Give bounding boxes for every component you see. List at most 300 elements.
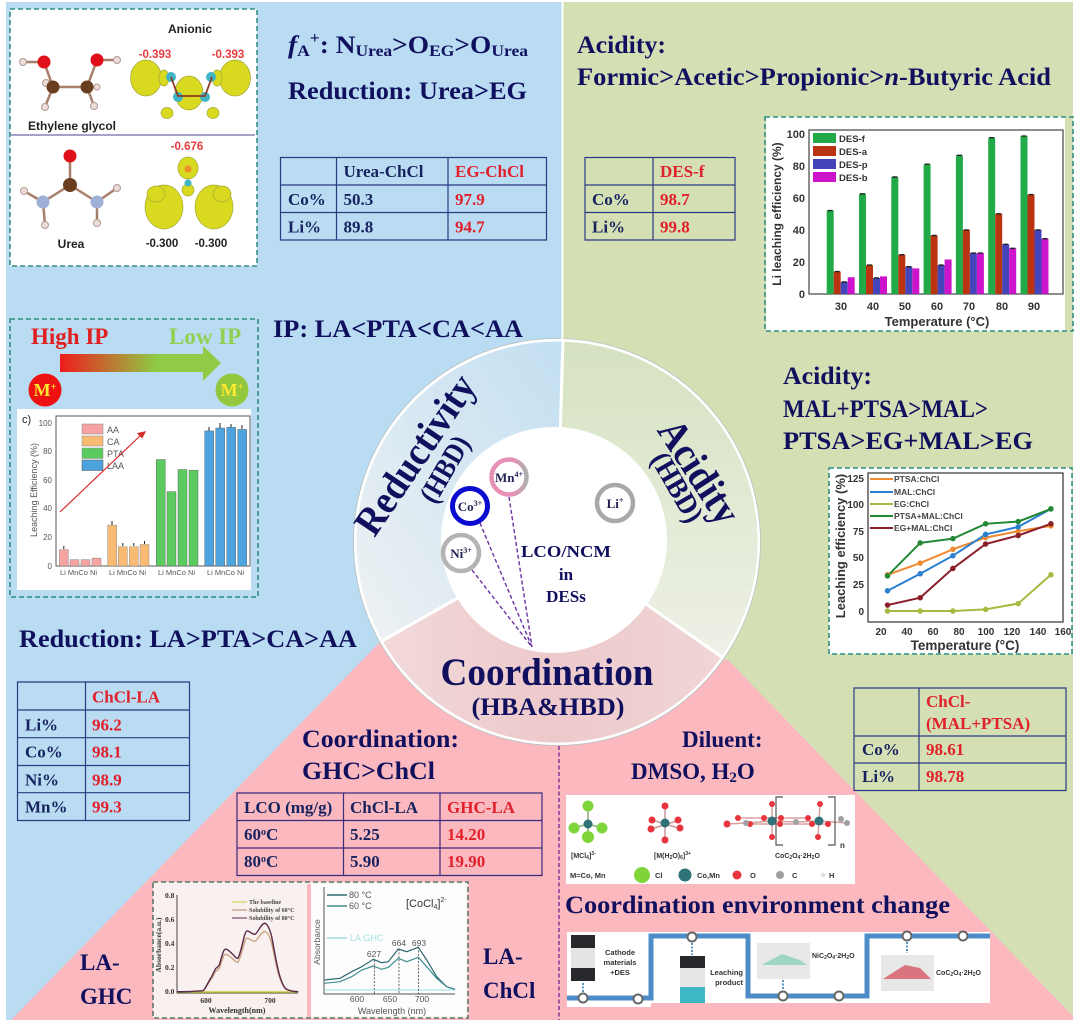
table: ChCl-(MAL+PTSA): Co%: [862, 740, 900, 759]
structure: CoC2O4 chain: n: [840, 841, 845, 850]
atom legend: O: [750, 871, 756, 880]
heading: diluent: DMSO, H: [631, 759, 729, 784]
atom legend: H: [829, 871, 834, 880]
axis labels: 650: [383, 994, 397, 1004]
atom legend: [570, 867, 834, 883]
table: urea vs EG: [280, 158, 546, 240]
heading: fA+ order: : N: [320, 32, 356, 59]
series: LAA: [205, 427, 247, 566]
table: ChCl-LA: 98.9: [92, 771, 122, 790]
ion: Li+: +: [619, 496, 624, 505]
structure: CoC2O4 chain: O: [814, 853, 820, 860]
table: LCO solubility: C: [266, 852, 278, 871]
centre text: in: [559, 565, 574, 584]
axis labels: 75: [853, 527, 864, 538]
sample: NiC2O4: 2: [824, 955, 827, 961]
axis labels: 0: [48, 562, 53, 571]
heading: fA+ order: Urea: [491, 43, 528, 60]
axis labels: 80: [996, 301, 1008, 313]
label: LA-GHC: GHC: [80, 984, 132, 1009]
table: urea vs EG: Co%: [288, 190, 326, 209]
table: LCO solubility: C: [266, 825, 278, 844]
line: EG+MAL: [888, 524, 1051, 605]
central ring diagram: [345, 338, 760, 746]
formula label: 2-: [440, 897, 447, 904]
axis labels: Wavelength(nm): [209, 1006, 266, 1015]
pipeline: [567, 936, 990, 998]
axis labels: Li MnCo Ni: [207, 568, 244, 577]
axis labels: Li leaching efficiency (%): [770, 142, 784, 286]
axis labels: 100: [39, 419, 53, 428]
table: ChCl-(MAL+PTSA): [854, 688, 1066, 790]
panel: ionization potential: [10, 319, 258, 597]
table: ChCl-LA: 98.1: [92, 743, 122, 762]
axis labels: 0: [799, 289, 805, 301]
bar chart: leaching efficiency: [17, 409, 251, 590]
atom legend: C: [792, 871, 798, 880]
sample: CoC2O4: 4: [959, 972, 962, 978]
series: DES-b: [848, 239, 1048, 294]
ion: Mn4+: [492, 460, 526, 494]
legend: PTSA:ChCl: [894, 474, 939, 484]
legend: [870, 474, 963, 533]
label: cathode materials: materials: [604, 958, 636, 967]
atom legend: M=Co, Mn: [570, 871, 606, 880]
heading: fA+ order: EG: [429, 43, 455, 60]
table: LCO solubility: o: [261, 827, 266, 838]
heading: fA+ order: >O: [392, 32, 429, 59]
ion: Ni3+: [443, 535, 479, 571]
table: ChCl-(MAL+PTSA): 98.78: [926, 767, 964, 786]
ion: Mn4+: 4+: [514, 470, 523, 479]
series: DES-p: [841, 230, 1042, 294]
label: LA-ChCl: LA-: [483, 944, 523, 969]
legend: LAA: [107, 461, 124, 471]
axis labels: 100: [978, 627, 995, 638]
label: Low IP: Low IP: [169, 324, 241, 349]
metal ion: low IP: [216, 374, 248, 406]
table: ChCl-(MAL+PTSA): 98.61: [926, 740, 964, 759]
molecule: ethylene glycol: [20, 54, 120, 133]
axis labels: [312, 919, 429, 1016]
heading: fA+ order: A: [297, 43, 310, 60]
axis labels: 20: [793, 257, 805, 269]
table: DES-f: DES-f: [660, 162, 705, 181]
connectors: [583, 942, 907, 995]
formula label: [CoCl: [406, 898, 434, 910]
sample: CoC2O4: 2: [973, 972, 976, 978]
centre text: LCO/NCM: [521, 542, 611, 561]
line: MAL: [888, 509, 1051, 591]
formula label: ]: [437, 898, 440, 910]
table: LCO solubility: 5.90: [350, 852, 380, 871]
legend: [327, 890, 384, 943]
axis labels: 664: [392, 938, 406, 948]
structure: CoC2O4 chain: CoC: [775, 853, 789, 860]
legend: PTA: [107, 449, 124, 459]
axis labels: [29, 419, 244, 577]
legend: EG:ChCl: [894, 499, 929, 509]
vial: cathode materials: [571, 935, 595, 981]
axis labels: 40: [43, 504, 53, 513]
legend: DES-p: [839, 160, 868, 171]
structure: MCl4: [MCl: [571, 853, 586, 860]
heading: acidity acids: [577, 32, 1051, 91]
table: LCO solubility: 80: [244, 852, 261, 871]
table: ChCl-LA: Co%: [25, 743, 63, 762]
curve: 60C: [324, 957, 455, 989]
heading: acidity MAL PTSA: [783, 363, 1033, 455]
sample: NiC2O4: [757, 943, 855, 979]
charge density: ethylene glycol: Anionic: [168, 22, 212, 36]
table: ChCl-(MAL+PTSA): ChCl-: [926, 692, 971, 711]
legend: DES-a: [839, 147, 868, 158]
axis labels: 20: [43, 533, 53, 542]
axis labels: 600: [200, 996, 212, 1005]
table: LCO solubility: o: [261, 854, 266, 865]
centre text: [521, 542, 611, 606]
ion: Co3+: Co: [458, 499, 474, 514]
series: DES-f: [827, 136, 1028, 294]
chart: LA-ChCl absorbance: [311, 884, 466, 1016]
structure: MCl4: [568, 800, 608, 861]
label: cathode materials: [604, 948, 636, 977]
metal ion: low IP: +: [238, 382, 244, 393]
table: ChCl-LA: 99.3: [92, 798, 122, 817]
bar chart: leaching efficiency: c): [22, 414, 31, 426]
heading: coordination GHC: Coordination:: [302, 726, 459, 753]
label: leaching product: [710, 968, 743, 987]
table: DES-f: Co%: [592, 190, 630, 209]
label: Acidity: Acidity: [649, 410, 751, 533]
table: DES-f: 99.8: [660, 218, 690, 236]
sample: CoC2O4: O: [953, 970, 959, 977]
label: cathode materials: +DES: [610, 968, 630, 977]
label: LA-ChCl: ChCl: [483, 978, 535, 1003]
structure: MCl4: ]: [589, 853, 591, 860]
heading: fA+ order: +: [310, 30, 320, 47]
heading: IP order: IP: LA<PTA<CA<AA: [273, 316, 523, 343]
axis labels: 60: [927, 627, 939, 638]
axis labels: Wavelength (nm): [358, 1006, 426, 1016]
structure: M(H2O)6: 2: [670, 855, 673, 861]
centre circle: [441, 427, 667, 653]
table: ChCl-LA: Li%: [25, 716, 58, 734]
series: PTA: [156, 460, 198, 566]
table: ChCl-LA: ChCl-LA: [92, 688, 161, 707]
table: DES-f: [585, 158, 735, 240]
axis labels: Li MnCo Ni: [158, 568, 195, 577]
curve: 60C: [177, 932, 298, 992]
table: ChCl-(MAL+PTSA): Li%: [862, 767, 895, 786]
axis labels: Absorbance(a.u.): [154, 917, 163, 973]
label: LA-GHC: LA-: [80, 950, 120, 975]
heading: reduction urea: Reduction: Urea>EG: [288, 78, 527, 105]
markers: [888, 509, 1051, 611]
heading: coordination GHC: GHC>ChCl: [302, 758, 435, 785]
metal ion: high IP: M: [34, 380, 51, 400]
joints: [578, 932, 968, 1004]
legend: Solubility of 80°C: [249, 915, 294, 922]
ion: Ni3+: Ni: [450, 546, 463, 561]
structure: MCl4: 4: [586, 855, 589, 861]
panel: molecules: [10, 9, 257, 266]
sample: CoC2O4: 2: [950, 972, 953, 978]
divider between blue and green: [562, 2, 564, 341]
background: pink coordination region: [11, 642, 1073, 1020]
line: PTSA+MAL: [888, 509, 1051, 576]
table: urea vs EG: 94.7: [455, 218, 485, 236]
legend: PTSA+MAL:ChCl: [894, 511, 963, 521]
panel: Li leaching bar chart: [765, 117, 1073, 331]
charge density: ethylene glycol: -0.393: [212, 49, 244, 61]
axis labels: 80: [953, 627, 965, 638]
table: LCO solubility: 19.90: [447, 852, 485, 871]
heading: acidity acids: Acidity:: [577, 32, 666, 59]
axis labels: 160: [1055, 627, 1072, 638]
axis labels: Leaching efficiency (%): [833, 474, 848, 618]
charge density: ethylene glycol: [130, 22, 250, 118]
legend: 60 °C: [349, 901, 372, 911]
metal ion: high IP: +: [51, 382, 57, 393]
axis labels: [154, 891, 276, 1015]
panel: coordination structures: [566, 795, 855, 884]
ring outline: [354, 338, 760, 746]
axis labels: 0.4: [165, 939, 175, 948]
legend: [82, 424, 124, 471]
background: blue reductivity region: [6, 2, 562, 1020]
heading: acidity MAL PTSA: MAL+PTSA>MAL>: [783, 396, 988, 423]
label: HBD reductivity: (HBD): [413, 430, 477, 509]
molecule: ethylene glycol: Ethylene glycol: [28, 119, 116, 133]
structure: M(H2O)6: [648, 802, 691, 861]
table: ChCl-LA: [18, 682, 190, 820]
molecule: urea: [20, 150, 120, 251]
formula label: 4: [434, 904, 438, 911]
table: urea vs EG: 97.9: [455, 190, 485, 209]
structure: M(H2O)6: 3+: [685, 851, 691, 857]
axis labels: 120: [1004, 627, 1021, 638]
table: DES-f: Li%: [592, 218, 625, 236]
sample: CoC2O4: CoC: [936, 970, 950, 977]
metal ion: high IP: [28, 374, 62, 406]
chart: LA-GHC absorbance: [154, 891, 298, 1015]
series: DES-a: [834, 195, 1034, 294]
table: urea vs EG: 50.3: [344, 190, 373, 209]
ion: Li+: [597, 485, 633, 521]
label: LA-GHC: [80, 950, 132, 1009]
axis labels: Absorbance: [312, 919, 322, 965]
axis labels: 700: [415, 994, 429, 1004]
legend: DES-b: [839, 173, 868, 184]
curve: 80C: [177, 923, 298, 992]
table: ChCl-LA: Ni%: [25, 771, 59, 790]
charge density: ethylene glycol: -0.393: [139, 49, 171, 61]
axis labels: 0.6: [165, 915, 175, 924]
table: LCO solubility: 14.20: [447, 825, 485, 844]
axis labels: 627: [367, 949, 381, 959]
label: cathode materials: Cathode: [605, 948, 635, 957]
axis labels: [770, 129, 1040, 329]
table: DES-f: 98.7: [660, 190, 690, 209]
axis labels: [833, 474, 1072, 653]
legend: CA: [107, 437, 120, 447]
atom legend: Cl: [655, 871, 662, 880]
axis labels: Temperature (°C): [911, 638, 1019, 653]
legend: AA: [107, 425, 119, 435]
label: HBD acidity: (HBD): [644, 447, 710, 528]
gradient arrow: [60, 346, 221, 381]
sample: NiC2O4: ·2H: [835, 953, 846, 960]
structure: M(H2O)6: 6: [680, 855, 683, 861]
sample: NiC2O4: NiC: [812, 953, 824, 960]
heading: acidity MAL PTSA: PTSA>EG+MAL>EG: [783, 428, 1033, 455]
heading: fA+ order: f: [288, 32, 300, 59]
structure: CoC2O4 chain: [724, 797, 850, 861]
heading: fA+ order: >O: [454, 32, 491, 59]
sample: NiC2O4: 2: [846, 955, 849, 961]
table: urea vs EG: Urea-ChCl: [344, 162, 424, 181]
heading: acidity acids: Formic>Acetic>Propionic> n-Butyric Acid: [577, 64, 1051, 91]
structure: M(H2O)6: ]: [683, 853, 685, 860]
axis labels: 0.0: [165, 987, 175, 996]
heading: diluent: Diluent:: [682, 727, 762, 752]
axis labels: 70: [963, 301, 975, 313]
axis labels: 600: [350, 994, 364, 1004]
background: green acidity region: [563, 2, 1073, 1020]
structure: M(H2O)6: O): [672, 853, 680, 860]
table: LCO solubility: GHC-LA: [447, 798, 516, 817]
heading: diluent: O: [737, 759, 755, 784]
divider in coordination region: [558, 746, 560, 1020]
ion: Co3+: [452, 488, 488, 524]
axis labels: 100: [847, 500, 864, 511]
sample: NiC2O4: O: [827, 953, 833, 960]
heading: fA+ order: Urea: [356, 43, 392, 60]
axis labels: 40: [867, 301, 879, 313]
axis labels: 693: [412, 938, 426, 948]
axis labels: 60: [43, 476, 53, 485]
heading: coordination GHC: [302, 726, 459, 785]
ion: Li+: Li: [607, 496, 619, 511]
label: HBA and HBD: (HBA&HBD): [472, 694, 624, 721]
axis labels: 0.2: [165, 963, 175, 972]
axis labels: Li MnCo Ni: [60, 568, 97, 577]
legend: The baseline: [249, 900, 282, 906]
axis labels: 0: [858, 607, 864, 618]
legend: [813, 133, 868, 184]
axis labels: Temperature (°C): [885, 314, 989, 329]
vial: leaching product: [680, 956, 705, 1003]
structure: CoC2O4 chain: ·2H: [800, 853, 812, 860]
ion: Ni3+: 3+: [463, 546, 472, 555]
label: Reductivity: Reductivity: [345, 366, 485, 543]
panel: leaching line chart: [829, 468, 1072, 654]
trend arrow: [60, 432, 145, 512]
curve: 80C: [324, 947, 455, 989]
table: LCO solubility: ChCl-LA: [350, 798, 419, 817]
label: LA-ChCl: [483, 944, 535, 1003]
axis labels: 50: [899, 301, 911, 313]
segment: acidity: [557, 340, 759, 658]
table: urea vs EG: Li%: [288, 218, 321, 236]
molecule: urea: Urea: [58, 237, 85, 251]
table: urea vs EG: EG-ChCl: [455, 162, 524, 181]
segment: reductivity: [355, 340, 563, 641]
sample: CoC2O4: [881, 955, 981, 991]
series: AA: [59, 550, 101, 566]
legend: LA:GHC: [350, 933, 384, 943]
axis labels: 25: [853, 580, 864, 591]
heading: acidity MAL PTSA: Acidity:: [783, 363, 872, 390]
sample: NiC2O4: O: [849, 953, 855, 960]
centre text: DESs: [546, 587, 586, 606]
structure: M(H2O)6: [M(H: [654, 853, 670, 860]
structure: CoC2O4 chain: 2: [789, 855, 792, 861]
table: urea vs EG: 89.8: [344, 218, 373, 236]
heading: diluent: 2: [729, 770, 737, 786]
line: PTSA: [888, 526, 1051, 575]
axis labels: Leaching Efficiency (%): [29, 443, 39, 537]
axis labels: Li MnCo Ni: [109, 568, 146, 577]
legend: 80 °C: [349, 890, 372, 900]
sample: CoC2O4: ·2H: [961, 970, 973, 977]
table: LCO solubility: [237, 793, 542, 876]
label: High IP: High IP: [31, 324, 108, 349]
axis labels: 20: [875, 627, 887, 638]
sample: CoC2O4: O: [975, 970, 981, 977]
table: LCO solubility: LCO (mg/g): [244, 798, 332, 817]
axis labels: 80: [43, 447, 53, 456]
table: ChCl-LA: 96.2: [92, 716, 122, 734]
axis labels: 90: [1028, 301, 1040, 313]
legend: MAL:ChCl: [894, 487, 935, 497]
heading: diluent: [631, 727, 762, 786]
table: LCO solubility: 60: [244, 825, 261, 844]
metal ion: low IP: M: [221, 380, 238, 400]
charge density: urea: -0.676: [171, 141, 203, 153]
label: leaching product: Leaching: [710, 968, 743, 977]
sample: NiC2O4: 4: [832, 955, 835, 961]
legend: DES-f: [839, 134, 866, 145]
ion: Co3+: 3+: [474, 499, 483, 508]
axis labels: 100: [787, 129, 805, 141]
axis labels: 700: [264, 996, 276, 1005]
structure: MCl4: 3-: [591, 851, 596, 857]
legend: Solubility of 60°C: [249, 907, 294, 914]
line: EG: [888, 575, 1051, 611]
axis labels: 60: [931, 301, 943, 313]
series: CA: [108, 525, 149, 566]
legend: EG+MAL:ChCl: [894, 523, 952, 533]
axis labels: 40: [793, 225, 805, 237]
heading: reduction LA: Reduction: LA>PTA>CA>AA: [19, 626, 357, 653]
panel: process flow: [567, 932, 990, 1007]
table: LCO solubility: 5.25: [350, 825, 380, 844]
legend: [232, 900, 294, 922]
dashed lines to metal ions: [472, 497, 532, 647]
structure: CoC2O4 chain: O: [792, 853, 798, 860]
label: leaching product: product: [715, 978, 743, 987]
axis labels: 140: [1030, 627, 1047, 638]
label: Coordination: Coordination: [440, 651, 654, 694]
charge density: urea: [145, 141, 233, 250]
atom legend: Co,Mn: [697, 871, 720, 880]
ion: Mn4+: Mn: [495, 470, 514, 485]
structure: CoC2O4 chain: 4: [798, 855, 801, 861]
structure: CoC2O4 chain: 2: [812, 855, 815, 861]
axis labels: 40: [901, 627, 913, 638]
